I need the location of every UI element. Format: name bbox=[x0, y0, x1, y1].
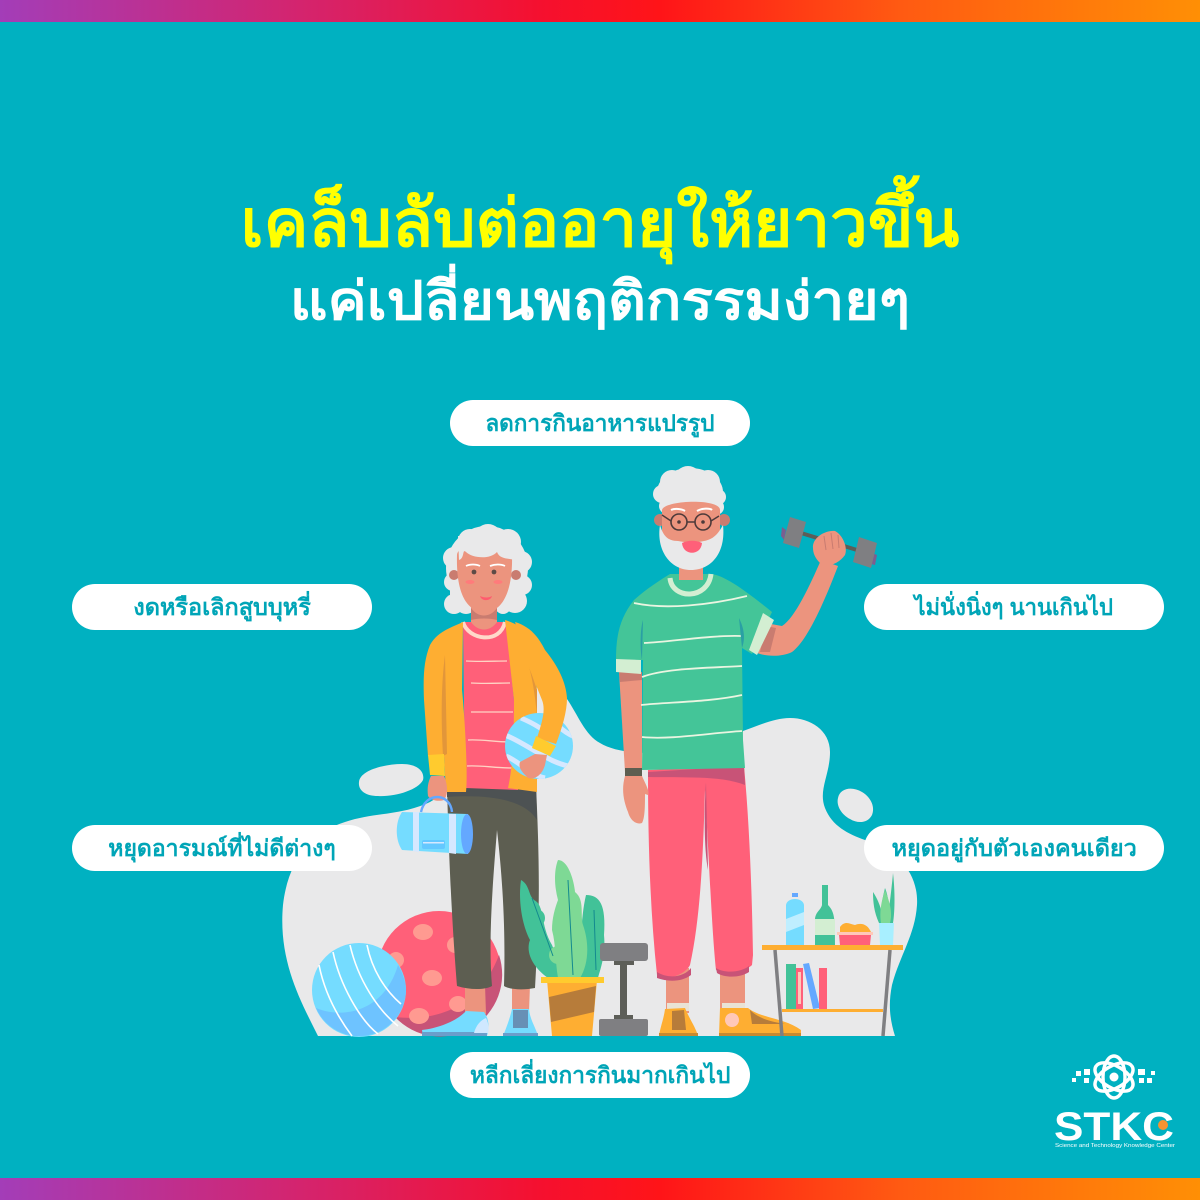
dumbbell stand bbox=[599, 943, 648, 1036]
pill: stop being alone: หยุดอยู่กับตัวเองคนเดียว bbox=[891, 835, 1137, 861]
hair bbox=[653, 466, 726, 516]
water bottle bbox=[786, 893, 804, 945]
small plant in cup bbox=[873, 873, 894, 945]
side table with items bbox=[762, 873, 903, 1036]
pill: don't sit too long bbox=[864, 584, 1164, 630]
atom emblem bbox=[1072, 1056, 1155, 1098]
title: เคล็บลับต่ออายุให้ยาวขึ้น bbox=[241, 186, 959, 260]
ball under arm bbox=[505, 710, 575, 779]
potted plant bbox=[520, 860, 604, 1036]
hair bbox=[443, 524, 532, 614]
face and beard bbox=[654, 502, 730, 580]
pill: stop bad moods: หยุดอารมณ์ที่ไม่ดีต่างๆ bbox=[108, 835, 336, 861]
green t-shirt bbox=[616, 574, 774, 770]
subtitle: แค่เปลี่ยนพฤติกรรมง่ายๆ bbox=[290, 272, 910, 331]
illustration: elderly couple exercising bbox=[282, 466, 918, 1037]
man figure bbox=[616, 466, 877, 1036]
pill: stop bad moods bbox=[72, 825, 372, 871]
cardigan body bbox=[424, 620, 537, 792]
trousers bbox=[447, 785, 539, 989]
pill: reduce processed food: ลดการกินอาหารแปรรูป bbox=[485, 410, 715, 436]
top gradient bar bbox=[0, 0, 1200, 22]
background blob bbox=[282, 685, 917, 1036]
pill: stop being alone bbox=[864, 825, 1164, 871]
legs and shoes bbox=[659, 968, 801, 1036]
bottom gradient bar bbox=[0, 1178, 1200, 1200]
duffel bag bbox=[397, 797, 473, 854]
trousers bbox=[648, 766, 753, 978]
hands bbox=[428, 754, 547, 801]
striped shirt bbox=[463, 622, 518, 790]
cardigan sleeve bbox=[515, 622, 567, 756]
green bottle bbox=[815, 885, 835, 945]
STKC logo bbox=[1054, 1054, 1175, 1149]
pill: quit smoking bbox=[72, 584, 372, 630]
raised arm and hand bbox=[755, 560, 838, 656]
books bbox=[786, 963, 827, 1009]
pill: avoid overeating: หลีกเลี่ยงการกินมากเกินไป bbox=[470, 1062, 730, 1088]
food bowl bbox=[837, 923, 873, 945]
neck and face bbox=[449, 536, 521, 630]
pill: don't sit too long: ไม่นั่งนิ่งๆ นานเกินไป bbox=[915, 594, 1113, 620]
legs and shelves bbox=[762, 945, 903, 950]
pill: quit smoking: งดหรือเลิกสูบบุหรี่ bbox=[133, 594, 311, 620]
dumbbell bbox=[781, 517, 877, 568]
pill: reduce processed food bbox=[450, 400, 750, 446]
pill: avoid overeating bbox=[450, 1052, 750, 1098]
wordmark: STKC bbox=[1054, 1105, 1174, 1149]
left arm and hand bbox=[619, 672, 649, 823]
red exercise ball bbox=[377, 911, 502, 1037]
blue exercise ball bbox=[312, 943, 406, 1037]
orange dot bbox=[1158, 1120, 1168, 1130]
legs and shoes bbox=[422, 985, 538, 1036]
tagline: Science and Technology Knowledge Center bbox=[1055, 1143, 1175, 1149]
hand gripping dumbbell bbox=[813, 531, 846, 565]
woman figure bbox=[397, 524, 575, 1036]
